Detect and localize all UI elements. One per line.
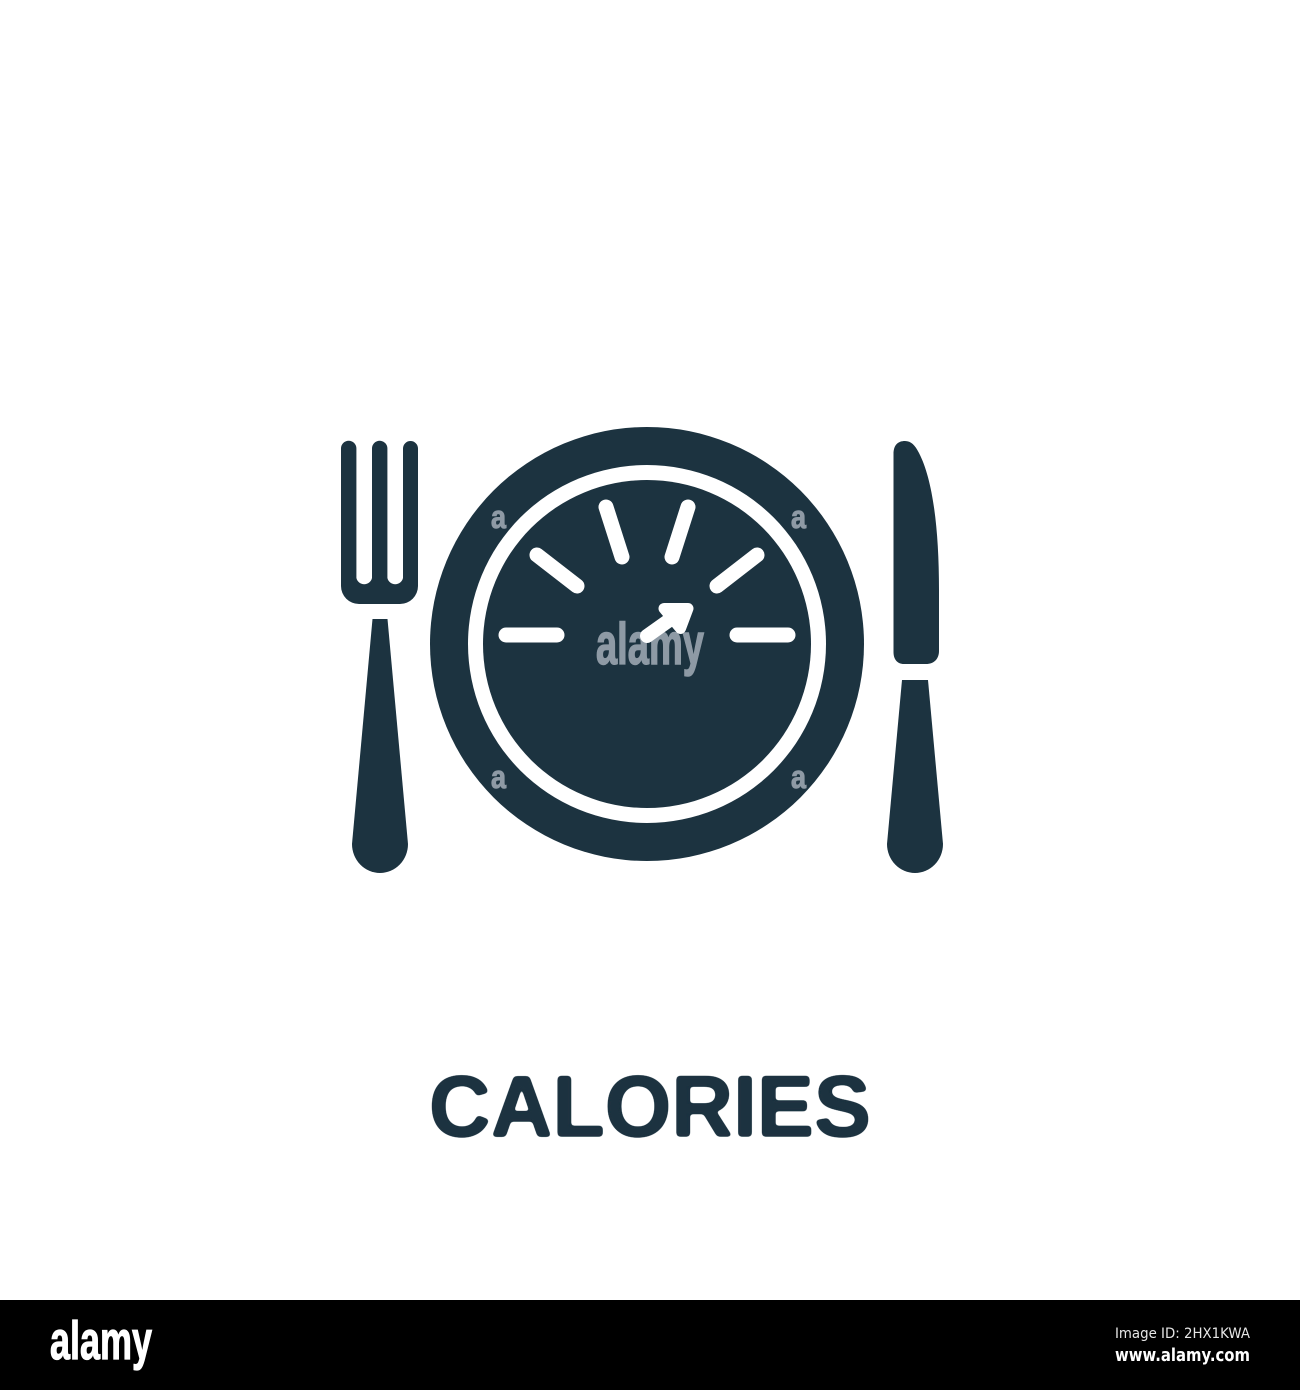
gauge tick marks: [506, 507, 788, 635]
footer website: www.alamy.com: [1115, 1345, 1250, 1366]
footer logo: alamy: alamy: [50, 1311, 152, 1371]
icon: plate with calorie gauge: [430, 427, 864, 861]
icon: fork: [341, 441, 418, 873]
watermarks: small alamy a marks: a: [491, 499, 506, 535]
gauge needle arrow: [647, 608, 688, 636]
watermark: alamy centre: alamy: [596, 612, 704, 677]
footer bar: [0, 1300, 1300, 1390]
watermarks: small alamy a marks: a: [791, 759, 806, 795]
icon: knife: [887, 441, 943, 873]
watermarks: small alamy a marks: [491, 499, 806, 795]
watermarks: small alamy a marks: a: [491, 759, 506, 795]
title: CALORIES: CALORIES: [429, 1059, 871, 1155]
footer image id: Image ID: 2HX1KWA: [1115, 1326, 1250, 1342]
watermarks: small alamy a marks: a: [791, 499, 806, 535]
